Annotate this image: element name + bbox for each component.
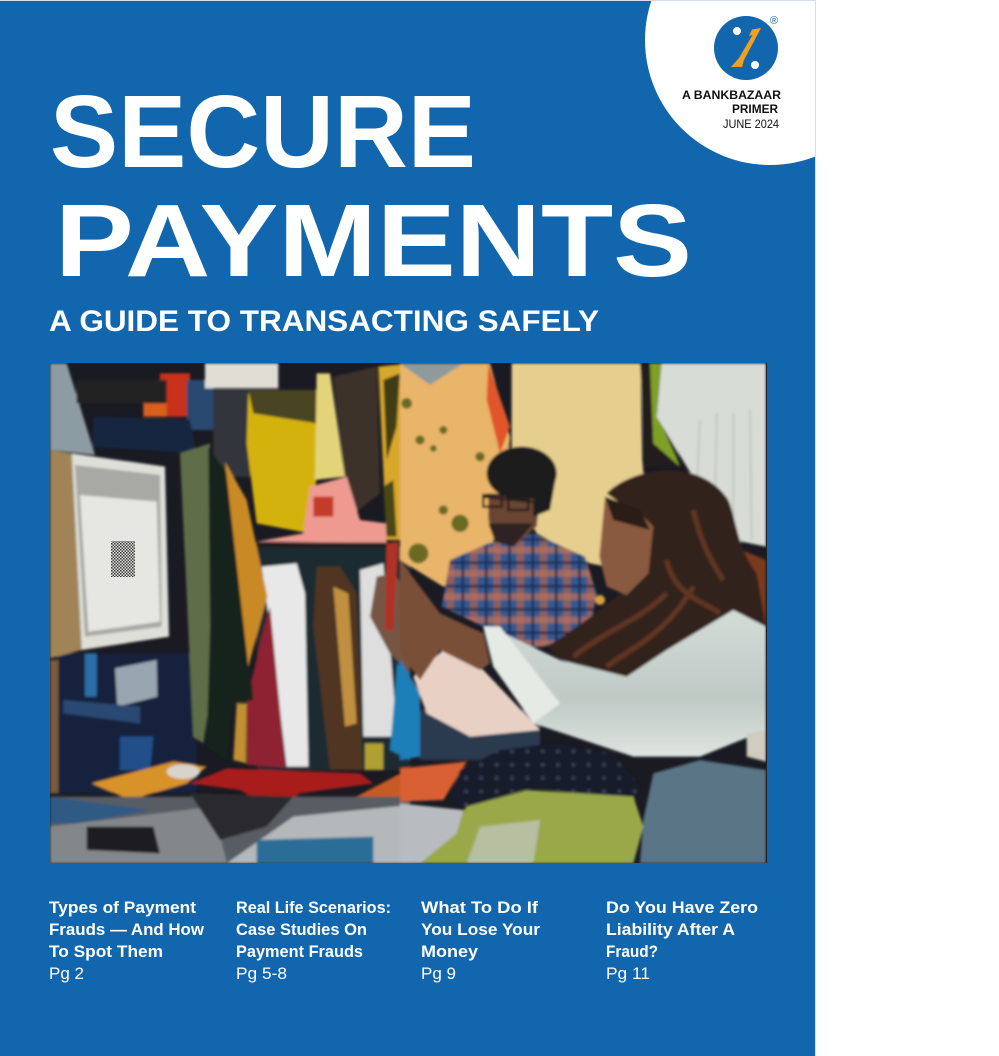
QR board [50, 450, 82, 658]
primer label [682, 90, 781, 128]
goods [400, 762, 467, 802]
subtitle: A GUIDE TO TRANSACTING SAFELY [49, 305, 599, 338]
title [50, 74, 692, 298]
teaser: zero liability [606, 898, 758, 983]
teaser: types of payment frauds [49, 898, 205, 983]
teaser: what to do if you lose your money: What To Do If [421, 898, 538, 917]
teaser: real life scenarios: Real Life Scenarios: [236, 898, 391, 917]
white corner circle [645, 1, 815, 165]
right half of photo [400, 363, 766, 863]
primer label: PRIMER [732, 102, 778, 116]
primer label: A BANKBAZAAR [682, 88, 781, 102]
photo: shopper scanning QR code at clothing stall [50, 363, 768, 863]
title: PAYMENTS [55, 183, 692, 298]
title: SECURE [50, 74, 476, 189]
article teasers [49, 898, 758, 983]
teaser: real life scenarios: Case Studies On [236, 920, 367, 939]
icon: BankBazaar percent logo [714, 16, 778, 80]
logo badge [645, 1, 815, 165]
teaser: what to do if you lose your money: Money [421, 942, 479, 961]
man [420, 710, 540, 760]
teaser: real life scenarios [236, 898, 391, 983]
teaser: zero liability: Fraud? [606, 942, 658, 961]
teaser: what to do if you lose your money: Pg 9 [421, 964, 456, 983]
goods on table [92, 762, 207, 800]
teaser: what to do if you lose your money: You Lose Your [421, 920, 540, 939]
teaser: types of payment frauds: Pg 2 [49, 964, 84, 983]
primer label: JUNE 2024 [723, 119, 780, 131]
teaser: types of payment frauds: Frauds — And How [49, 920, 205, 939]
teaser: types of payment frauds: To Spot Them [49, 942, 163, 961]
teaser: types of payment frauds: Types of Payment [49, 898, 196, 917]
left half of photo [50, 363, 410, 863]
registered mark: ® [770, 15, 778, 27]
woman [742, 550, 766, 625]
teaser: zero liability: Do You Have Zero [606, 898, 758, 917]
hand and phone [370, 573, 410, 673]
teaser: real life scenarios: Pg 5-8 [236, 964, 287, 983]
teaser: what to do if you lose your money [421, 898, 540, 983]
teaser: zero liability: Liability After A [606, 920, 735, 939]
QR code on board [111, 541, 135, 577]
teaser: real life scenarios: Payment Frauds [236, 942, 363, 961]
teaser: zero liability: Pg 11 [606, 964, 650, 983]
